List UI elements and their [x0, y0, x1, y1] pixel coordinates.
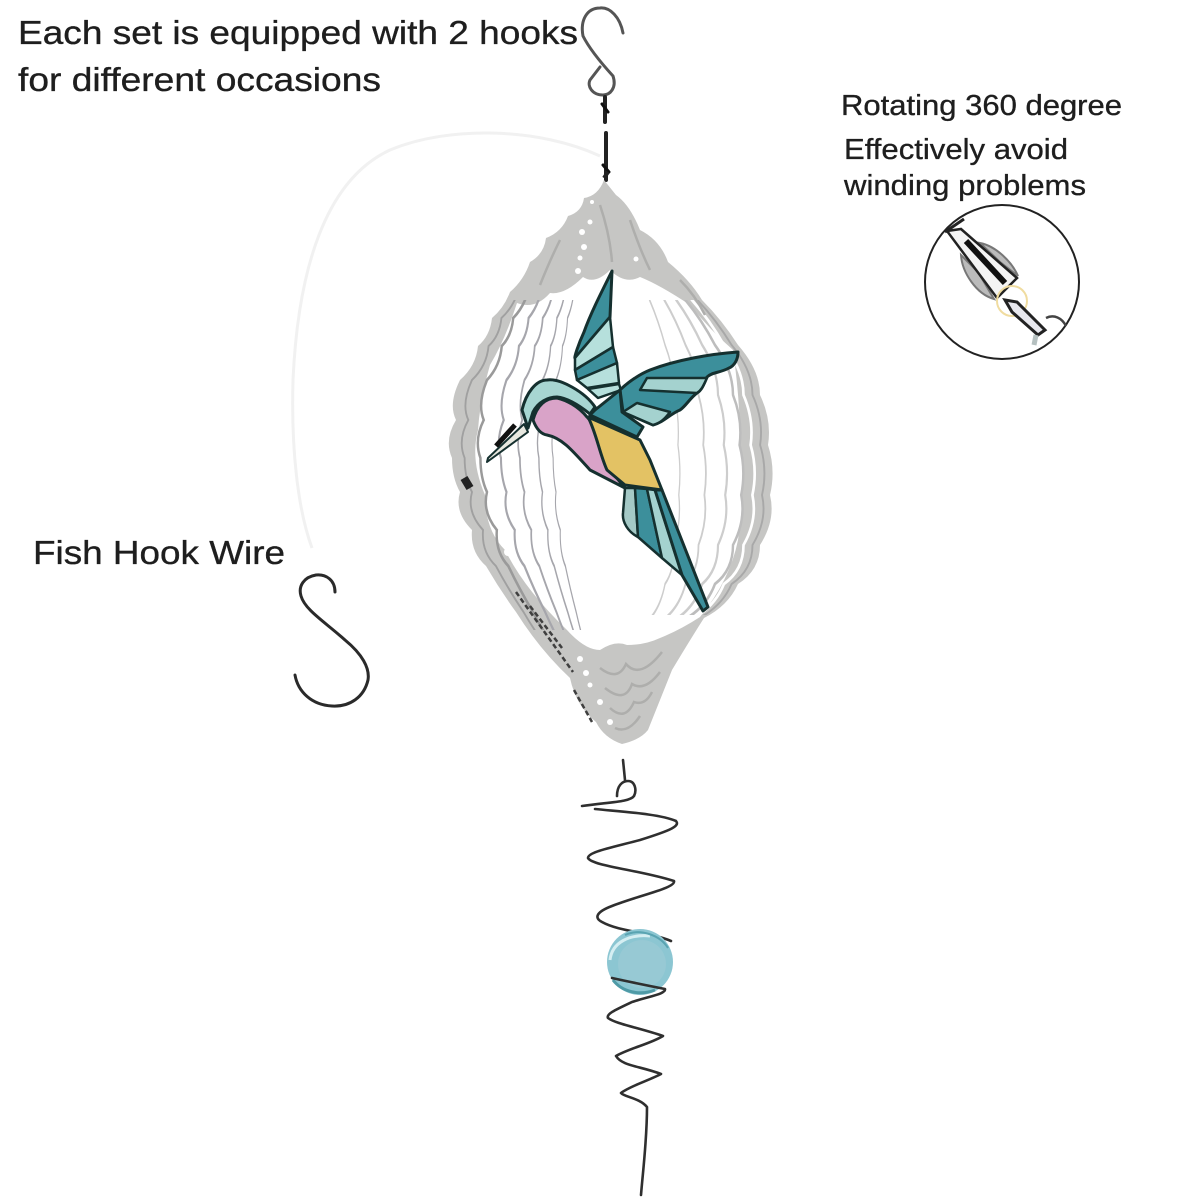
- bird throat and belly: [533, 398, 625, 488]
- spinner band: [449, 180, 773, 744]
- bird chest: [588, 417, 662, 490]
- text: fish hook wire label: Fish Hook Wire: [33, 534, 285, 571]
- text: hooks note: Each set is equipped with 2 hooks: [18, 14, 578, 51]
- icon: top S hook with chain: [582, 8, 623, 180]
- bird tail: [623, 488, 708, 611]
- bird back: [590, 390, 643, 437]
- wind spinner frame: [449, 172, 773, 744]
- spinner ribs left: [460, 300, 582, 630]
- text: rotation note: Rotating 360 degree: [841, 90, 1122, 122]
- bird head: [522, 380, 595, 428]
- bird upper wing: [575, 271, 621, 398]
- text: rotation note: Effectively avoid: [844, 134, 1068, 166]
- glass ball: [607, 929, 673, 995]
- spinner ribs right: [648, 300, 766, 615]
- icon: loose S hook: [295, 575, 368, 706]
- hummingbird: [487, 271, 738, 611]
- lower spiral tail: [608, 978, 665, 1195]
- spiral tail: [582, 760, 677, 941]
- bird beak: [487, 424, 528, 462]
- text: rotation note: winding problems: [843, 170, 1086, 202]
- text: hooks note: [18, 14, 578, 98]
- bird right wing: [620, 352, 738, 425]
- spinner cap shading: [516, 592, 592, 722]
- icon: swivel detail circle: [925, 205, 1079, 359]
- fish hook wire: [293, 133, 600, 548]
- text: rotation note: [841, 90, 1122, 202]
- text: hooks note: for different occasions: [18, 61, 381, 98]
